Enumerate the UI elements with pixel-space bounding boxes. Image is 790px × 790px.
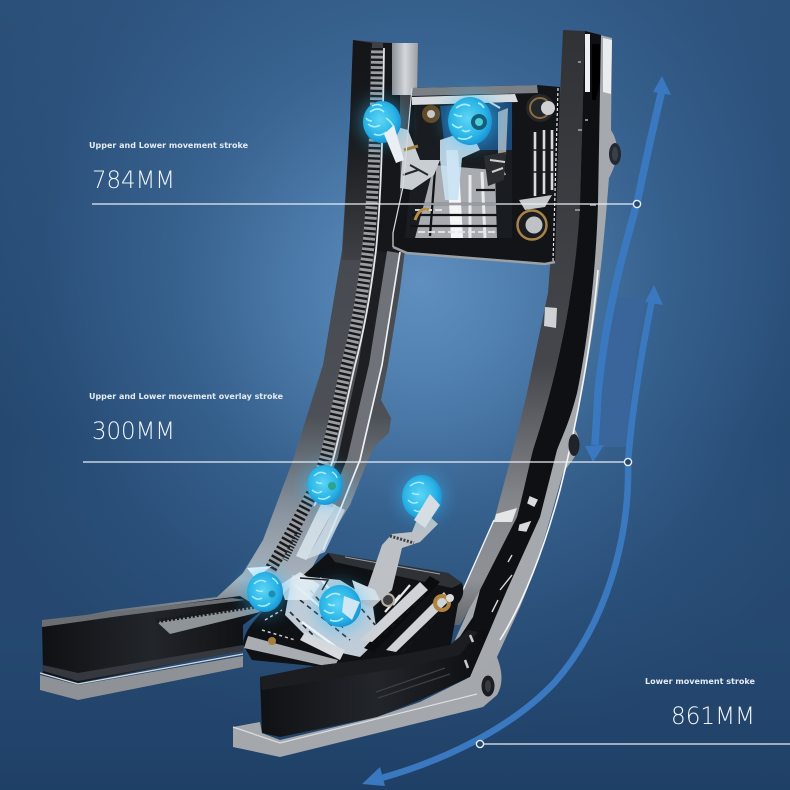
right rail grey inner band — [447, 30, 585, 625]
upper centre roller arm — [440, 130, 480, 200]
roller: upper centre — [448, 97, 492, 145]
label: 300MM: Upper and Lower movement overlay stroke — [89, 392, 284, 401]
label: 861MM — [645, 677, 756, 730]
lower right bolt — [518, 195, 552, 240]
leader line: 861MM — [476, 740, 790, 748]
right rail silver outer — [455, 35, 617, 690]
right rail — [440, 30, 621, 690]
lower right knob — [482, 676, 494, 696]
roller: upper left — [363, 101, 404, 163]
upper right cylinder panel — [530, 130, 556, 196]
right rail black band — [440, 31, 601, 670]
mechanism centre plate — [285, 575, 378, 657]
leader line: 784MM — [92, 200, 641, 208]
glow behind rollers — [243, 94, 498, 632]
roller: lower left — [247, 572, 283, 612]
label: 300MM — [89, 392, 284, 445]
right rail upper knob — [609, 143, 621, 165]
left rail — [43, 40, 418, 623]
label: 861MM: Lower movement stroke — [645, 677, 756, 686]
roller: lower centre — [319, 585, 361, 627]
arrow: upper stroke, double headed — [585, 76, 671, 462]
mechanism slanted bar — [364, 576, 440, 652]
left rail inner bands — [323, 252, 400, 550]
upper right spring bolt — [526, 94, 555, 122]
arrow: lower stroke, from foot to overlay top — [362, 285, 663, 786]
upper left roller arm — [390, 125, 440, 190]
lower massage mechanism — [243, 500, 463, 668]
left rail rack — [270, 48, 384, 570]
label: 784MM — [89, 141, 249, 194]
upper centre plate — [410, 150, 497, 238]
lower connecting arms — [296, 500, 336, 560]
right foot block — [233, 630, 502, 757]
arrow: overlay stroke shaded band — [596, 297, 645, 447]
label: 300MM: 300MM — [92, 417, 175, 445]
leader line: 300MM — [83, 458, 632, 466]
upper massage mechanism — [390, 85, 560, 264]
roller: raised arm — [402, 475, 442, 528]
label: 784MM: 784MM — [92, 166, 175, 194]
label: 784MM: Upper and Lower movement stroke — [89, 141, 249, 150]
label: 861MM: 861MM — [671, 702, 755, 730]
roller: lower rail — [307, 465, 343, 505]
left foot block — [40, 596, 263, 700]
right rail middle knob — [568, 434, 580, 456]
lower long silver arm — [354, 515, 438, 608]
